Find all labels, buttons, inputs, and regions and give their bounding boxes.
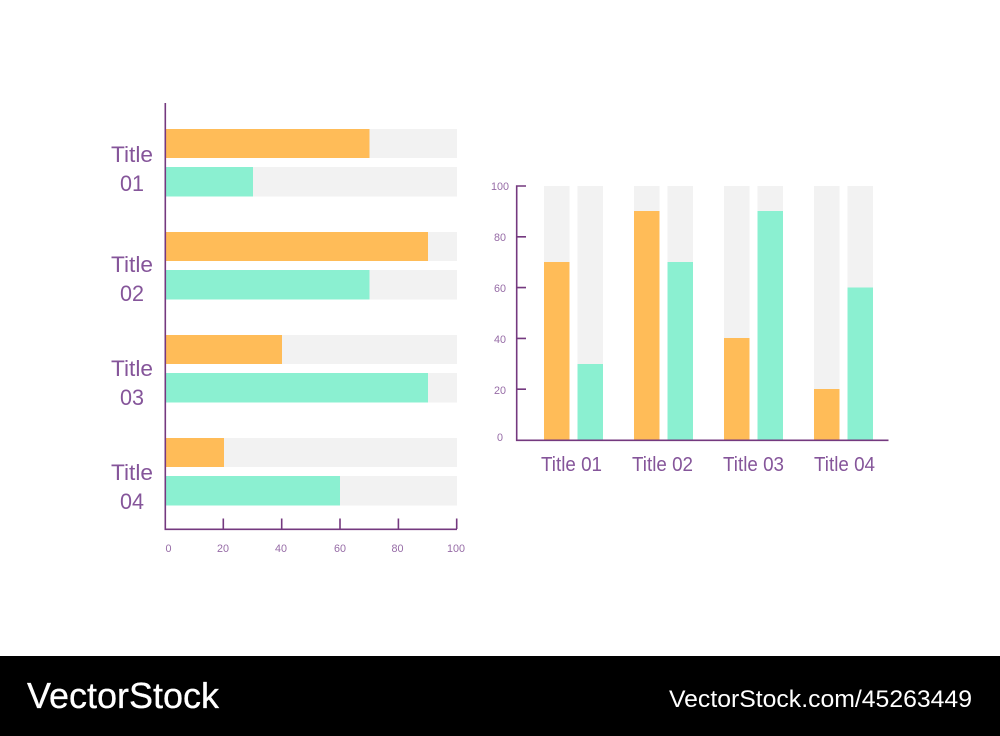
bars: Title 02 [166,232,457,300]
row labels: 02 [120,281,144,306]
panel: horizontal bar chart [111,103,465,555]
x axis values: 80 [392,543,404,555]
row labels: Title [111,142,153,167]
column labels: Title 01 [541,454,602,476]
bars: Title 03 [166,335,457,402]
row labels: Title [111,252,153,277]
x axis values: 100 [447,543,465,555]
columns: Title 03 [724,186,783,440]
column labels: Title 02 [632,454,693,476]
brand name: VectorStock [27,675,220,716]
y axis values [491,181,509,444]
column labels [541,454,875,476]
columns: Title 04 [814,186,873,440]
row labels: Title [111,460,153,485]
column labels: Title 03 [723,454,784,476]
y axis values: 20 [494,385,506,397]
y axis values: 60 [494,283,506,295]
x axis values: 60 [334,543,346,555]
row labels: Title [111,356,153,381]
y axis values: 0 [497,432,503,444]
x axis values: 0 [166,543,172,555]
row labels: 01 [120,171,144,196]
column labels: Title 04 [814,454,875,476]
bars: Title 04 [166,438,457,506]
bars: Title 01 [166,129,457,196]
y axis with ticks [517,186,888,440]
row labels [111,142,153,514]
y axis values: 100 [491,181,509,193]
panel: vertical bar chart [491,181,888,476]
x axis values: 20 [217,543,229,555]
row labels: 03 [120,385,144,410]
x axis values [166,543,465,555]
y axis values: 40 [494,334,506,346]
columns: Title 02 [634,186,693,440]
y axis values: 80 [494,232,506,244]
x axis values: 40 [275,543,287,555]
x axis with ticks [165,103,457,529]
image id: VectorStock.com/45263449 [669,686,972,713]
columns: Title 01 [544,186,603,440]
footer banner [0,656,1000,736]
row labels: 04 [120,489,144,514]
